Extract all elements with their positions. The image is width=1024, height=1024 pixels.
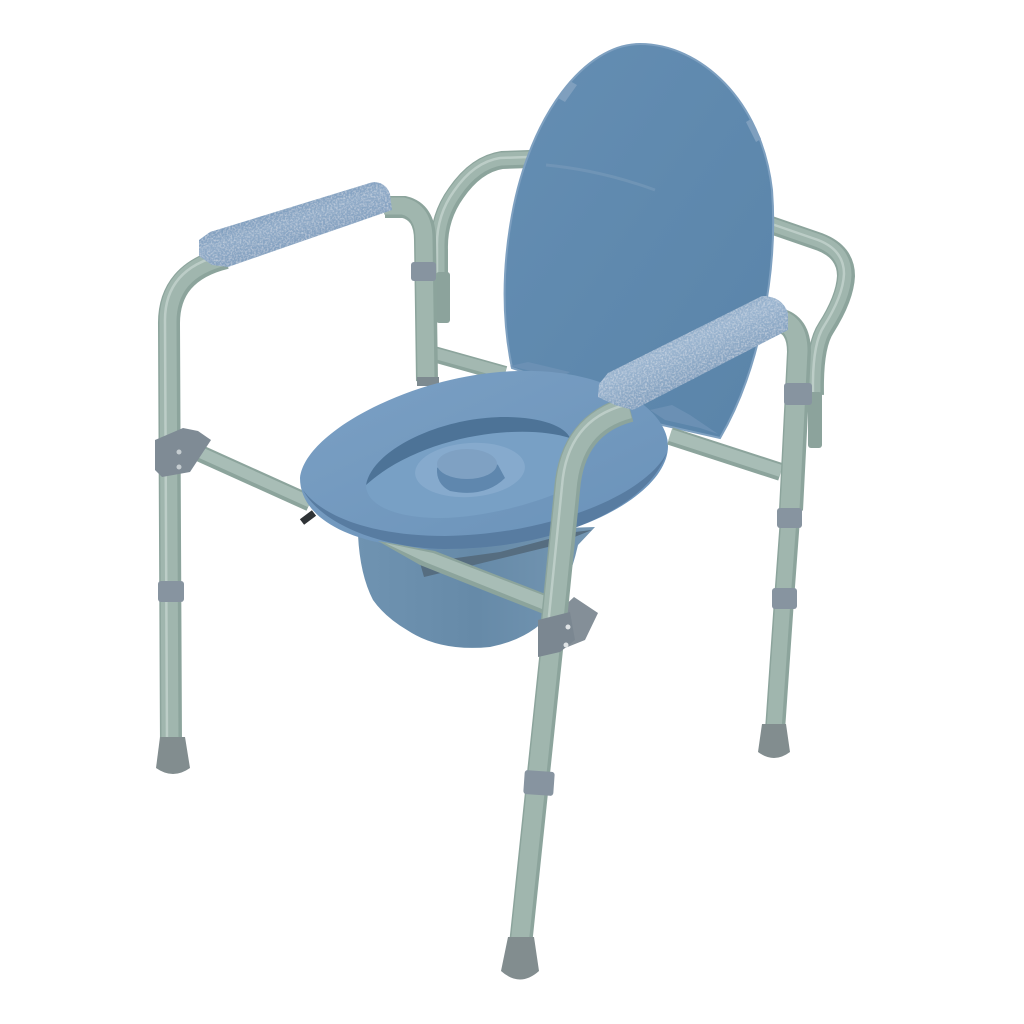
back left tube	[436, 157, 530, 323]
bracket left	[155, 428, 211, 477]
bucket	[358, 527, 595, 648]
foot right	[758, 724, 790, 758]
bowl opening	[366, 417, 570, 518]
band leg	[158, 581, 184, 602]
pin	[302, 513, 314, 522]
hinge plate right	[650, 405, 718, 434]
back right tube	[763, 221, 846, 448]
lid ring	[413, 439, 527, 501]
foot front	[501, 937, 539, 980]
knob	[437, 456, 505, 493]
right armrest	[598, 296, 788, 410]
clamp back right	[808, 392, 822, 448]
clamp back left	[436, 272, 450, 323]
bands	[784, 383, 812, 405]
hinge plate on lid	[510, 362, 570, 378]
right cross tube	[670, 435, 781, 472]
seat	[300, 371, 668, 549]
lid	[504, 44, 773, 438]
front post	[520, 405, 630, 940]
left armrest	[199, 182, 392, 267]
band front leg	[523, 770, 555, 796]
foot left	[156, 737, 190, 774]
right post	[772, 319, 812, 730]
bowl shadow	[366, 417, 570, 485]
band upper	[411, 262, 436, 281]
left rear tube and cross tube	[384, 206, 505, 386]
front bracket rear	[560, 597, 598, 650]
seat front rim	[303, 452, 667, 549]
bucket rim and under-seat bar	[420, 530, 592, 577]
left post	[155, 255, 314, 745]
bracket clamp front	[538, 612, 575, 657]
band lower	[417, 377, 439, 386]
cross tube left	[197, 452, 310, 503]
front cross tube	[378, 541, 548, 615]
